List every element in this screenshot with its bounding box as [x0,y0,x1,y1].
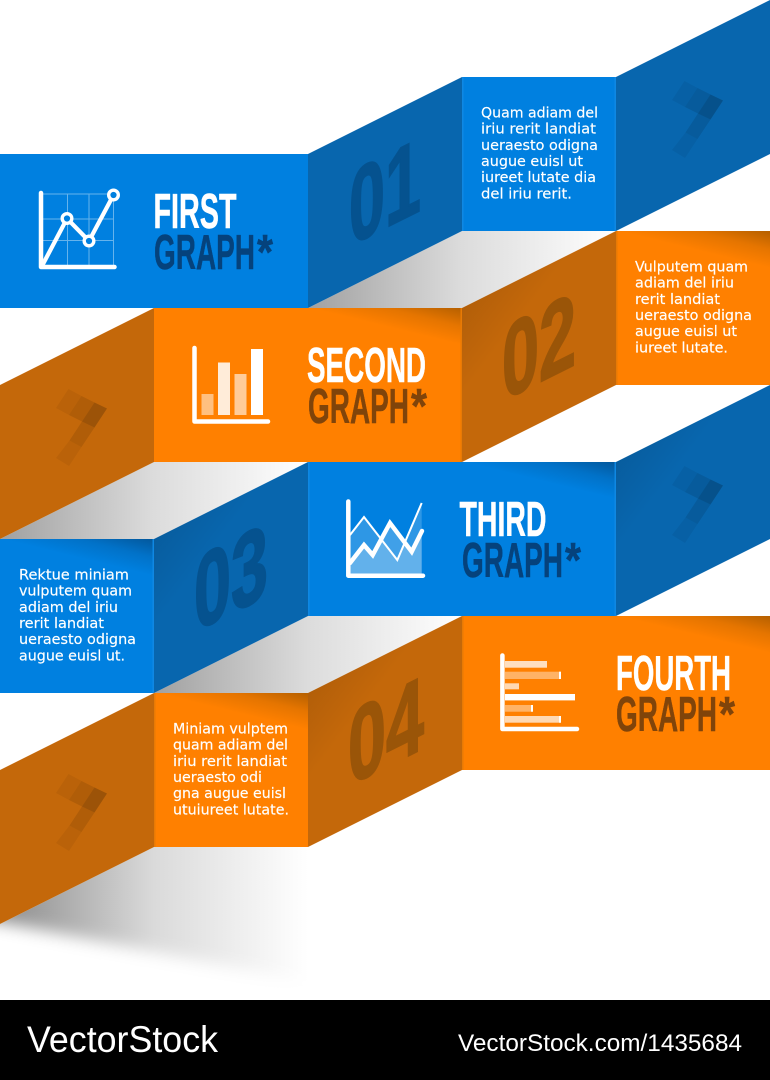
grey shadow under third ribbon [154,616,462,693]
number 03: 03 [194,500,268,655]
text block 3: Rektue miniam [19,568,129,584]
footer logo: VectorStock [27,1019,218,1060]
floor shadow under fourth ribbon [0,847,330,1020]
footer url: VectorStock.com/1435684 [458,1030,742,1057]
text block 2: iureet lutate. [635,340,728,356]
text block 3: vulputem quam [19,584,132,600]
heading: fourth graph: * [719,688,736,742]
heading: first graph [154,185,274,280]
text block 4: quam adiam del [173,738,288,754]
panel shadow [154,693,308,730]
text block 1: del iriu rerit. [481,186,572,202]
panel shadow [616,231,770,268]
text block 3: adiam del iriu [19,600,118,616]
icon: line chart [41,190,118,267]
text block 1: iureet lutate dia [481,170,596,186]
heading: first graph: GRAPH [154,226,255,280]
heading: third graph: * [565,534,582,588]
fold shadow [154,462,308,693]
heading: first graph: * [257,226,274,280]
heading: third graph: THIRD [460,493,546,547]
panel shadow [0,539,154,576]
footer bar [0,1000,770,1080]
panel shadow [618,616,770,653]
text block 4: gna augue euisl [173,786,286,802]
number 01: 01 [349,115,421,269]
icon: horizontal bar chart [502,656,577,729]
text block 1: ueraesto odigna [481,138,598,154]
text block 4: ueraesto odi [173,770,262,786]
text block 2: adiam del iriu [635,276,734,292]
text block 3: ueraesto odigna [19,632,136,648]
heading: second graph: SECOND [307,339,426,393]
heading: first graph: FIRST [154,185,237,239]
fold shadow [308,616,462,847]
text block 2: Vulputem quam [635,260,748,276]
heading: third graph [460,493,582,588]
icon: area chart [348,502,423,576]
text block 2: augue euisl ut [635,324,737,340]
number 04: 04 [348,653,424,809]
panel shadow [464,462,616,499]
text block 1: augue euisl ut [481,154,583,170]
text block 4: Miniam vulptem [173,722,288,738]
fold shadow [462,231,616,462]
text block 3 [19,568,136,664]
arrow glyph 1 [672,81,723,158]
grey shadow under first ribbon [308,231,616,308]
number 02: 02 [502,269,576,424]
text block 4: iriu rerit landiat [173,754,287,770]
arrow glyph 3 [672,466,723,543]
ribbon 4: fourth graph [0,616,770,924]
text block 1: Quam adiam del [481,106,598,122]
ribbon 1: first graph [0,0,770,308]
ribbon 3: third graph [0,385,770,693]
text block 1: iriu rerit landiat [481,122,596,138]
grey shadow under second ribbon [0,462,308,539]
text block 1 [481,106,598,202]
ribbon 2: second graph [0,231,770,539]
text block 2: ueraesto odigna [635,308,752,324]
fold shadow [616,385,770,616]
text block 4: utuiureet lutate. [173,802,289,818]
icon: bar chart [194,348,268,422]
text block 3: augue euisl ut. [19,648,125,664]
heading: second graph: GRAPH [308,380,409,434]
arrow glyph 4 [56,774,107,851]
heading: second graph: * [411,380,428,434]
text block 4 [173,722,289,818]
text block 2: rerit landiat [635,292,720,308]
text block 3: rerit landiat [19,616,104,632]
heading: third graph: GRAPH [462,534,563,588]
panel shadow [310,308,462,345]
arrow glyph 2 [56,389,107,466]
heading: second graph [307,339,428,434]
text block 2 [635,260,752,356]
heading: fourth graph [616,647,736,742]
